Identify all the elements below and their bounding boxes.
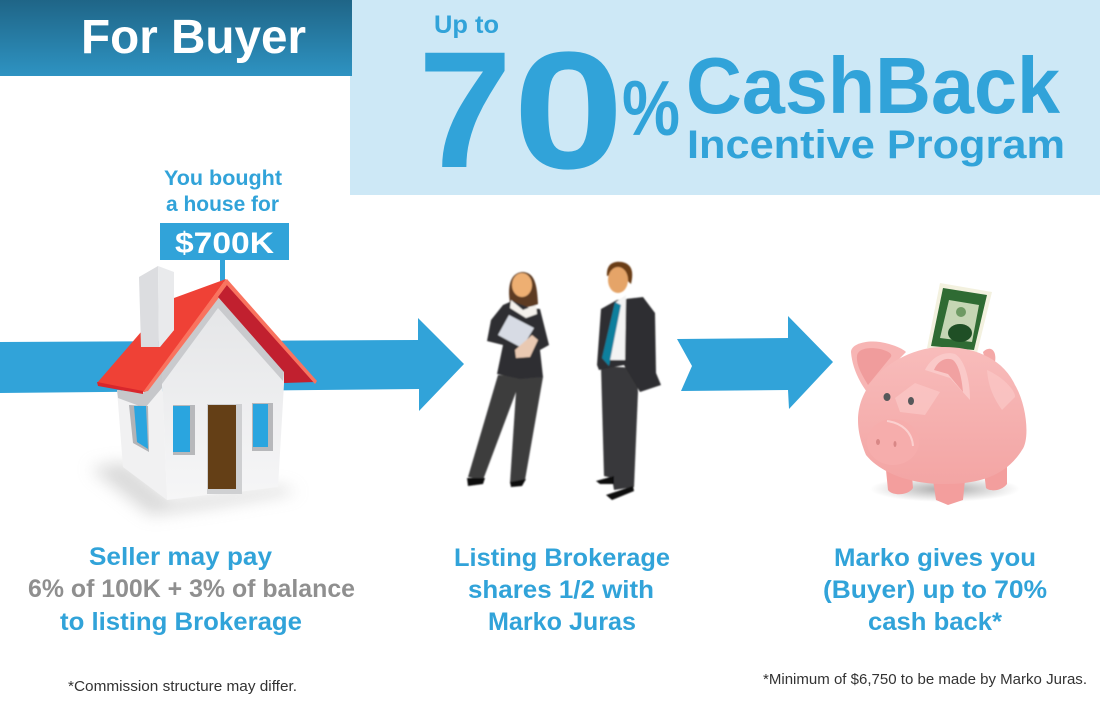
hair [607, 262, 632, 284]
header band: For Buyer [0, 0, 352, 76]
left ear [851, 341, 906, 392]
shirt [605, 295, 626, 360]
icon: business man [596, 262, 661, 500]
highlights [895, 383, 940, 415]
pants [468, 375, 543, 483]
jacket [487, 301, 549, 379]
heading: CashBack: CashBack [686, 41, 1060, 130]
right ear [925, 353, 970, 400]
text: cash back*: cash back* [868, 608, 1002, 636]
heading: For Buyer: For Buyer [81, 11, 306, 64]
jacket [597, 297, 661, 392]
percent sign: % [622, 64, 680, 152]
price tag: $700K: $700K [175, 227, 274, 260]
text: Up to: Up to [434, 11, 499, 39]
chimney [139, 266, 159, 347]
dollar bill [927, 283, 992, 353]
snout [867, 419, 919, 465]
arrow: main flow to brokerage [0, 318, 464, 411]
caption: seller pays commission [28, 543, 355, 636]
caption: brokerage shares [454, 544, 670, 636]
shoes [467, 478, 526, 487]
body [858, 347, 1026, 484]
text: to listing Brokerage: to listing Brokerage [60, 608, 302, 636]
caption: cash back to buyer [823, 544, 1047, 636]
footnote: commission structure: *Commission structure may differ. [68, 678, 297, 695]
footnote: minimum amount: *Minimum of $6,750 to be made by Marko Juras. [763, 671, 1087, 688]
feet [886, 465, 1007, 505]
pants [601, 366, 638, 490]
big number: 70 [418, 18, 624, 204]
tail [983, 349, 995, 362]
big number: 70: 7 [418, 18, 512, 203]
icon: piggy bank with dollar bill [851, 283, 1026, 505]
folder [498, 315, 534, 348]
front wall [162, 297, 284, 500]
left wall [117, 370, 167, 500]
hand [515, 335, 538, 358]
text: (Buyer) up to 70%: (Buyer) up to 70% [823, 576, 1047, 604]
eyes [884, 393, 890, 401]
text: Marko Juras: Marko Juras [488, 608, 636, 636]
shoes [596, 476, 634, 500]
nostrils [876, 439, 880, 445]
tie [602, 302, 621, 366]
windows and door [129, 405, 149, 452]
icon: house [90, 266, 317, 515]
text: Seller may pay: Seller may pay [89, 543, 272, 571]
face [608, 267, 628, 293]
face [512, 273, 532, 297]
big number: 70: 0 [513, 18, 624, 204]
text: shares 1/2 with: shares 1/2 with [468, 576, 654, 604]
text: You bought: You bought [164, 167, 282, 190]
subheading: Incentive Program: Incentive Program [687, 123, 1065, 167]
text: commission formula: 6% of 100K + 3% of balance [28, 575, 355, 603]
text: a house for: a house for [166, 193, 279, 216]
arrow: brokerage to piggy bank [677, 316, 833, 409]
text: Marko gives you: Marko gives you [834, 544, 1036, 572]
collar [510, 300, 537, 318]
icon: business woman [467, 272, 549, 487]
hair [509, 272, 538, 307]
panel: cashback headline [350, 0, 1100, 204]
text: Listing Brokerage: Listing Brokerage [454, 544, 670, 572]
callout: You bought a house for $700K [160, 167, 289, 282]
roof [97, 279, 226, 392]
